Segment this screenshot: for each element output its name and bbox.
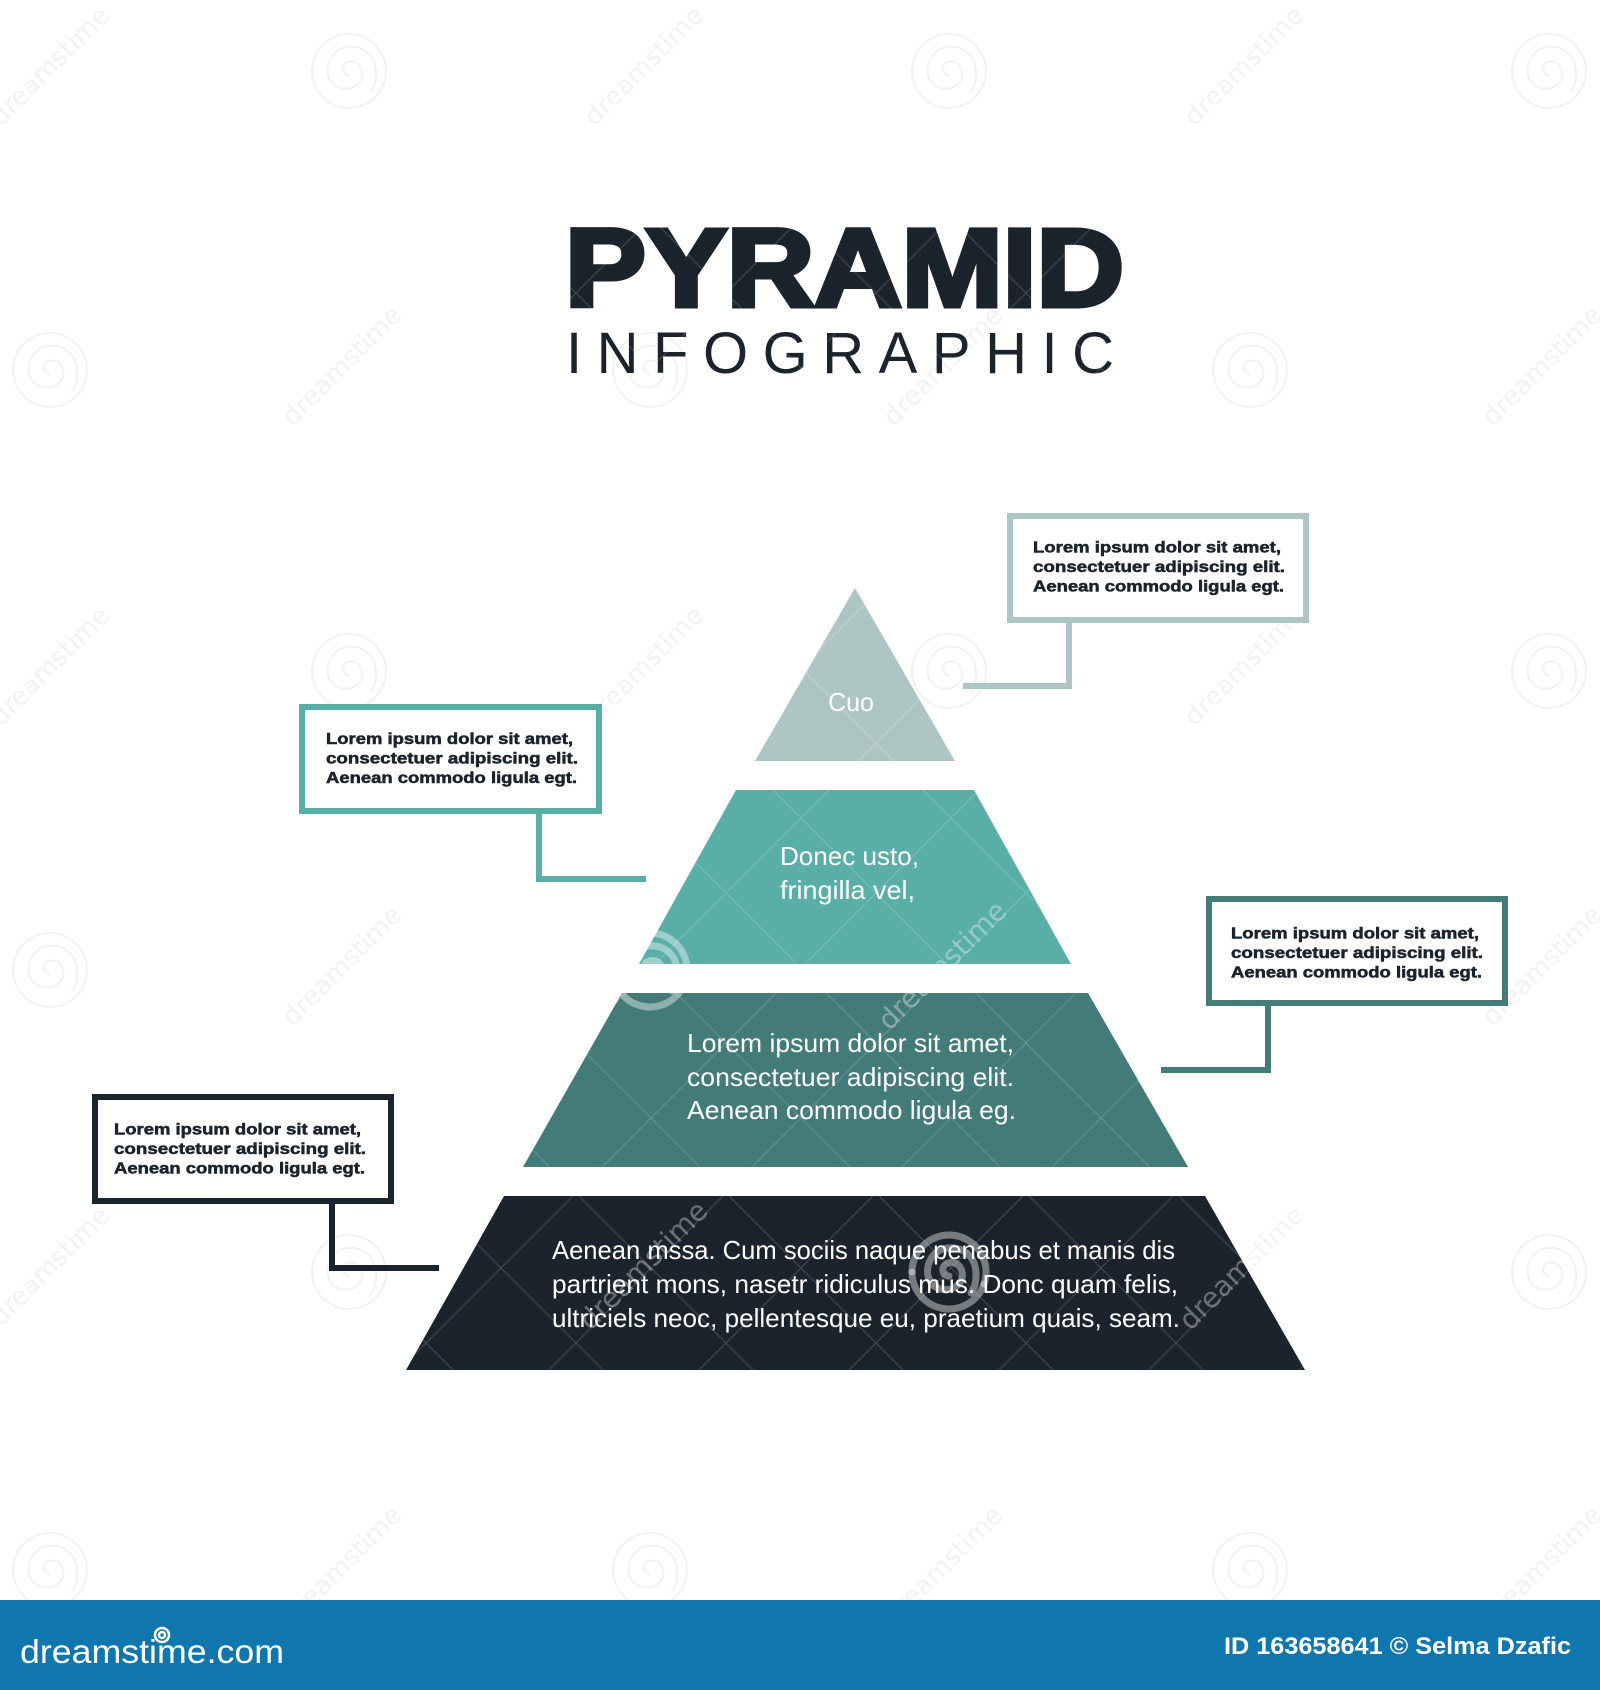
pyramid level 2: fringilla vel, <box>780 875 915 905</box>
pyramid level 4: base: Aenean mssa. Cum sociis naque penabus et manis dis <box>552 1235 1175 1265</box>
pyramid level 4: base: ultriciels neoc, pellentesque eu, praetium quais, seam. <box>552 1303 1180 1333</box>
pyramid <box>406 588 1305 1370</box>
watermark: faint repeating spirals and wordmarks: dreamstime <box>1179 601 1310 732</box>
footer banner <box>0 1600 1600 1690</box>
watermark: faint repeating spirals and wordmarks: dreamstime <box>878 1501 1009 1632</box>
footer credit: ID 163658641 © Selma Dzafic <box>1224 1633 1571 1660</box>
watermark: faint repeating spirals and wordmarks: dreamstime <box>277 1501 408 1632</box>
icon: spiral logo mark <box>155 1628 169 1642</box>
callout: top right: Aenean commodo ligula egt. <box>1033 578 1284 596</box>
watermark: faint repeating spirals and wordmarks: dreamstime <box>1179 1201 1310 1332</box>
callout: right <box>1161 899 1505 1070</box>
callout: upper left: Aenean commodo ligula egt. <box>326 770 577 787</box>
callout: lower left <box>95 1097 439 1268</box>
pyramid level 3: Aenean commodo ligula eg. <box>687 1095 1016 1125</box>
pyramid level 3: Lorem ipsum dolor sit amet, <box>687 1028 1014 1058</box>
footer logo wordmark: dreamstime.com <box>20 1633 284 1670</box>
callout: right: Aenean commodo ligula egt. <box>1231 964 1482 982</box>
callout: upper left: Lorem ipsum dolor sit amet, <box>326 731 573 748</box>
pyramid level 4: base: partrient mons, nasetr ridiculus mus. Donc quam felis, <box>552 1269 1178 1299</box>
pyramid level 3 <box>523 993 1188 1167</box>
callout: top right <box>963 516 1306 686</box>
callout: top right: Lorem ipsum dolor sit amet, <box>1033 540 1281 556</box>
pyramid level 2: Donec usto, <box>780 841 919 871</box>
title <box>565 207 1124 386</box>
watermark: faint repeating spirals and wordmarks: dreamstime <box>277 901 408 1032</box>
watermark: faint repeating spirals and wordmarks: dreamstime <box>878 301 1009 432</box>
callout: lower left: Aenean commodo ligula egt. <box>114 1160 365 1178</box>
pyramid level 3: consectetuer adipiscing elit. <box>687 1062 1014 1092</box>
watermark: faint repeating spirals and wordmarks: dreamstime <box>277 301 408 432</box>
watermark overlay: lattice lines and stronger marks on the pyramid: dreamstime <box>1172 1194 1314 1336</box>
callout: top right: consectetuer adipiscing elit. <box>1033 559 1285 576</box>
watermark overlay: lattice lines and stronger marks on the pyramid: dreamstime <box>871 894 1013 1036</box>
pyramid level 4: base <box>406 1196 1305 1370</box>
pyramid level 1: apex: Cuo <box>828 687 874 717</box>
callout: upper left: consectetuer adipiscing elit. <box>326 750 578 768</box>
pyramid level 1: apex <box>755 588 955 761</box>
watermark: faint repeating spirals and wordmarks: dreamstime <box>1179 1 1310 132</box>
subtitle: INFOGRAPHIC: INFOGRAPHIC <box>566 321 1114 386</box>
title: PYRAMID: PYRAMID <box>565 207 1124 330</box>
callout: right: Lorem ipsum dolor sit amet, <box>1231 926 1479 942</box>
watermark: faint repeating spirals and wordmarks: dreamstime <box>579 1 710 132</box>
callout: upper left <box>302 707 646 879</box>
watermark: faint repeating spirals and wordmarks: dreamstime <box>579 601 710 732</box>
callout: lower left: Lorem ipsum dolor sit amet, <box>114 1122 361 1138</box>
callout: right: consectetuer adipiscing elit. <box>1231 945 1483 962</box>
pyramid level 2 <box>639 790 1071 964</box>
callout: lower left: consectetuer adipiscing elit. <box>114 1141 366 1158</box>
watermark overlay: lattice lines and stronger marks on the pyramid: dreamstime <box>572 1194 714 1336</box>
